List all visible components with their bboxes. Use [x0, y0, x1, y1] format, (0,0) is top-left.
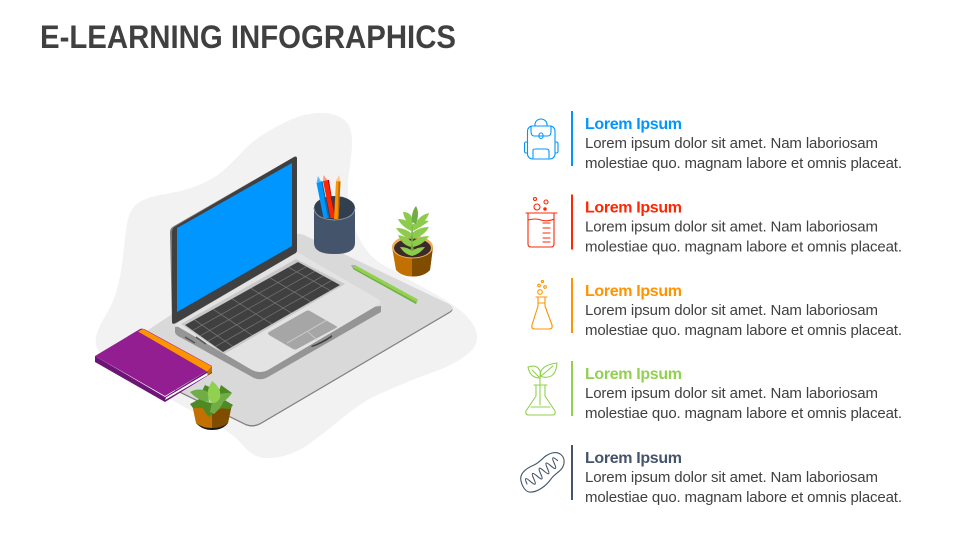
text: Lorem Ipsum [585, 450, 682, 467]
text: Lorem ipsum dolor sit amet. Nam laboriosam [585, 469, 878, 486]
text: Lorem ipsum dolor sit amet. Nam laboriosam [585, 218, 878, 236]
row 3: flask [532, 278, 902, 339]
row 2: beaker [526, 194, 902, 256]
row 5: mitochondrion [521, 445, 902, 506]
desk mat [109, 234, 452, 427]
text: molestiae quo. magnam labore et omnis placeat. [585, 322, 902, 339]
divider [571, 278, 573, 333]
text: molestiae quo. magnam labore et omnis placeat. [585, 405, 902, 422]
icon: plant in flask [526, 363, 557, 415]
text: Lorem Ipsum [585, 116, 682, 133]
screen display [177, 163, 292, 312]
keyboard [185, 262, 340, 352]
pen cup with pencils [314, 175, 355, 254]
text [585, 283, 902, 339]
trackpad [268, 310, 337, 350]
text [585, 450, 902, 506]
ports [185, 337, 206, 344]
divider [571, 445, 573, 500]
title: E-LEARNING INFOGRAPHICS [40, 19, 456, 55]
icon: backpack [524, 119, 558, 159]
text: molestiae quo. magnam labore et omnis placeat. [585, 155, 902, 172]
screen [170, 157, 297, 324]
text: Lorem Ipsum [585, 366, 682, 383]
row 4: plant in flask [526, 361, 902, 422]
text: Lorem Ipsum [585, 283, 682, 300]
icon: flask [532, 280, 552, 329]
text: molestiae quo. magnam labore et omnis placeat. [585, 489, 902, 506]
purple notebook [95, 329, 212, 402]
hinge well [181, 259, 345, 354]
thumb notch [311, 335, 332, 347]
laptop [170, 157, 381, 379]
text: Lorem Ipsum [585, 200, 682, 216]
text: molestiae quo. magnam labore et omnis placeat. [585, 238, 902, 256]
red pencil [323, 175, 335, 218]
row 1: backpack [524, 111, 902, 172]
divider [571, 361, 573, 416]
text [585, 200, 902, 256]
illustration: e-learning desk [95, 113, 477, 458]
background blob [96, 113, 477, 458]
text: Lorem ipsum dolor sit amet. Nam laboriosam [585, 302, 878, 319]
potted plant [392, 206, 433, 276]
text: Lorem ipsum dolor sit amet. Nam laboriosam [585, 385, 878, 402]
blue pencil [316, 176, 330, 218]
text [585, 116, 902, 172]
icon: mitochondrion [521, 453, 564, 492]
text: Lorem ipsum dolor sit amet. Nam laboriosam [585, 135, 878, 152]
laptop base [175, 306, 381, 379]
icon: beaker [526, 198, 557, 247]
text [585, 366, 902, 422]
small succulent [190, 381, 233, 430]
divider [571, 194, 573, 250]
divider [571, 111, 573, 166]
green pencil [351, 265, 418, 304]
orange pencil [334, 175, 340, 219]
